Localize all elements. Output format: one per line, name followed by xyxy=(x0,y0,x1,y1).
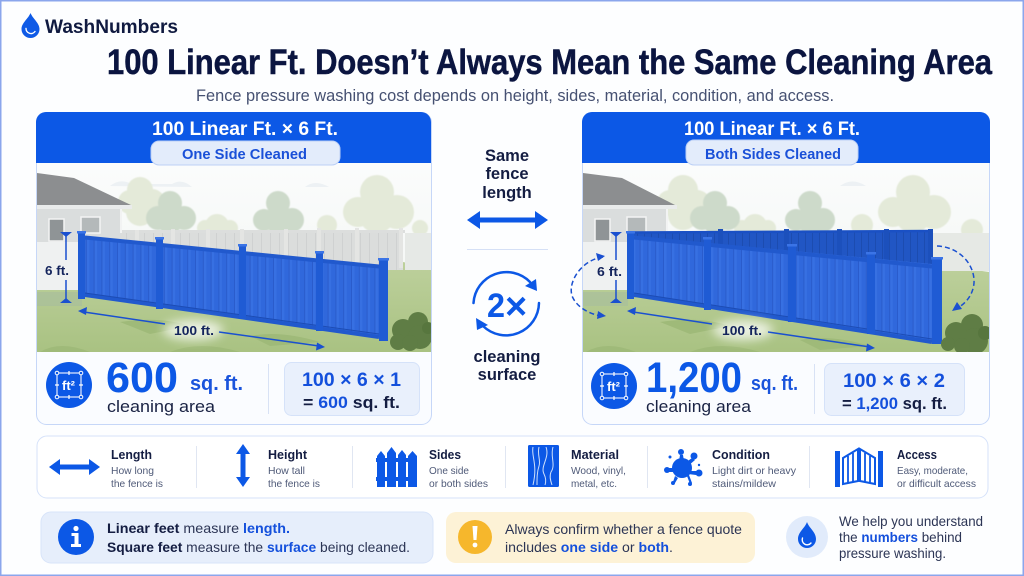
center column: 2x cleaning surface: surface xyxy=(478,366,536,384)
house xyxy=(37,173,132,242)
fence: blue panels xyxy=(77,231,389,341)
callout: confirm quote sides: Always confirm whether a fence quote xyxy=(505,521,742,537)
callout: linear vs square feet: Square feet measure the surface being cleaned. xyxy=(107,539,410,555)
factor: height: Height xyxy=(268,448,308,462)
dimension: 100 ft xyxy=(627,307,875,352)
panel header: both sides xyxy=(582,112,990,163)
stat: 1,200 sq. ft.: sq. ft. xyxy=(751,373,798,395)
factor: material: Wood, vinyl, xyxy=(571,465,626,477)
factor: access xyxy=(835,448,976,490)
icon: square feet xyxy=(591,363,637,409)
factor: sides: Sides xyxy=(429,448,461,462)
factor: length: Length xyxy=(111,448,152,462)
icon: 2x cycle arrows: × xyxy=(505,286,527,328)
icon: water drop xyxy=(798,522,816,548)
scene: one-side fence in a yard xyxy=(37,163,434,352)
center column: same fence length xyxy=(467,147,548,229)
formula: 100 x 6 x 1 xyxy=(284,362,420,416)
stat: 1,200 sq. ft.: cleaning area xyxy=(646,398,752,416)
stat: 1,200 sq. ft. xyxy=(646,354,798,416)
dimension: 100 ft: 100 ft. xyxy=(174,323,214,338)
arrow: dashed wrap right xyxy=(937,246,974,311)
stat: 1,200 sq. ft.: 1,200 xyxy=(646,354,742,402)
formula: 100 x 6 x 2: = 1,200 sq. ft. xyxy=(842,395,947,413)
icon: info xyxy=(58,519,94,555)
factor: access: or difficult access xyxy=(897,478,976,490)
fence: back side xyxy=(634,229,933,265)
formula: 100 x 6 x 1: = 600 sq. ft. xyxy=(303,394,400,412)
stat: 600 sq. ft.: cleaning area xyxy=(107,398,216,416)
panel: one side cleaned xyxy=(36,112,434,424)
factor: material: metal, etc. xyxy=(571,478,617,490)
factor: sides: One side xyxy=(429,465,469,477)
factor: length: the fence is xyxy=(111,478,163,490)
callout: brand message xyxy=(786,513,983,561)
factor: access: Easy, moderate, xyxy=(897,465,968,477)
factor: length xyxy=(49,448,163,490)
center column: same fence length: length xyxy=(482,184,532,202)
factor: condition xyxy=(664,448,797,490)
formula: 100 x 6 x 2: 100 × 6 × 2 xyxy=(843,371,945,392)
panel: both sides cleaned xyxy=(582,112,992,424)
icon: double arrow xyxy=(467,211,548,229)
dimension: 6 ft: 6 ft. xyxy=(597,264,622,279)
callout: linear vs square feet: Linear feet measure length. xyxy=(107,520,290,536)
factor: height: How tall xyxy=(268,465,305,477)
pill: one side cleaned xyxy=(151,141,340,165)
stat: 600 sq. ft.: 600 xyxy=(106,354,178,402)
factor: length: How long xyxy=(111,465,154,477)
factor: sides: or both sides xyxy=(429,478,488,490)
factor: sides xyxy=(376,447,488,490)
bush xyxy=(941,314,989,352)
header text: both sides: 100 Linear Ft. × 6 Ft. xyxy=(684,119,860,140)
panel header: one side xyxy=(36,112,431,163)
center column: 2x cleaning surface: cleaning xyxy=(474,348,540,366)
fence: front side xyxy=(626,231,943,344)
factor: material xyxy=(528,445,626,490)
pill: both sides cleaned xyxy=(686,140,858,165)
callout: confirm quote sides: includes one side or both. xyxy=(505,539,673,555)
callout: linear vs square feet xyxy=(41,512,433,563)
icon: 2x cycle arrows: 2 xyxy=(487,287,505,325)
pill: one side cleaned: One Side Cleaned xyxy=(182,147,307,163)
house xyxy=(583,173,677,242)
factor: condition: Condition xyxy=(712,448,770,462)
center column: same fence length: Same xyxy=(485,147,529,165)
factor: access: Access xyxy=(897,448,937,462)
stat: 600 sq. ft. xyxy=(106,354,243,416)
factor: height xyxy=(236,444,320,490)
icon: warning xyxy=(458,520,492,554)
factor: height: the fence is xyxy=(268,478,320,490)
panel: cost factors strip xyxy=(37,436,988,498)
logo: WashNumbers: WashNumbers xyxy=(45,16,178,38)
center column: 2x cleaning surface xyxy=(474,272,540,384)
formula: 100 x 6 x 1: 100 × 6 × 1 xyxy=(302,370,401,391)
icon: square feet: ft² xyxy=(62,378,76,393)
icon: square feet: ft² xyxy=(607,379,621,394)
factor: material: Material xyxy=(571,448,619,462)
formula: 100 x 6 x 2 xyxy=(824,364,964,416)
callout: brand message: We help you understand xyxy=(839,513,983,529)
bush xyxy=(390,312,434,351)
factor: condition: Light dirt or heavy xyxy=(712,465,797,477)
callout: brand message: pressure washing. xyxy=(839,545,946,561)
pill: both sides cleaned: Both Sides Cleaned xyxy=(705,147,841,163)
stat: 600 sq. ft.: sq. ft. xyxy=(190,373,243,395)
dimension: 6 ft xyxy=(597,232,622,303)
arrow: dashed wrap left xyxy=(571,253,606,319)
factor: condition: stains/mildew xyxy=(712,478,776,490)
callout: confirm quote sides xyxy=(446,512,755,563)
header text: one side: 100 Linear Ft. × 6 Ft. xyxy=(152,119,338,140)
scene: two-side fence in a yard xyxy=(583,163,992,354)
subtitle: Fence pressure washing cost depends on height, sides, material, condition, and access. xyxy=(196,87,834,105)
dimension: 6 ft xyxy=(45,232,72,303)
dimension: 6 ft: 6 ft. xyxy=(45,263,69,278)
center column: same fence length: fence xyxy=(485,165,529,183)
dimension: 100 ft xyxy=(78,307,325,350)
dimension: 100 ft: 100 ft. xyxy=(722,323,762,338)
callout: brand message: the numbers behind xyxy=(839,529,962,545)
icon: 2x cycle arrows xyxy=(474,272,539,335)
icon: square feet xyxy=(46,362,92,408)
